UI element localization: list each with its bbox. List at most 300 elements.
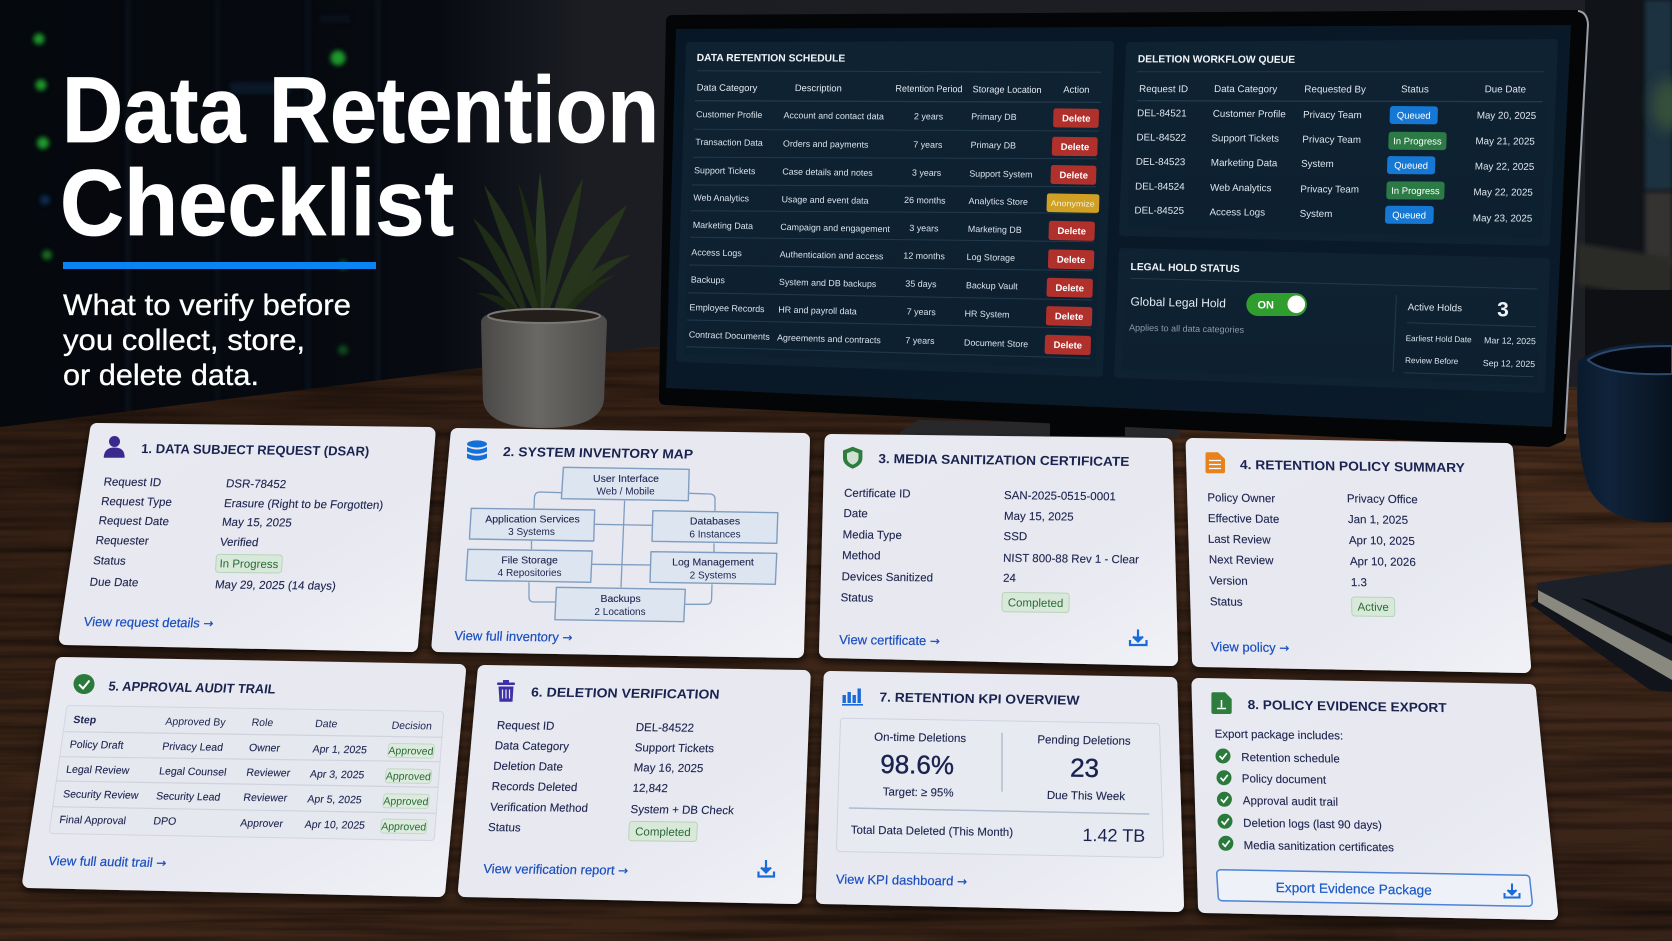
audit row: final approval [59, 814, 427, 834]
button: export evidence package: Export Evidence Package [1276, 880, 1432, 898]
row: support tickets [694, 165, 1096, 185]
link: view verification report: View verification report → [483, 861, 629, 878]
active holds: Active Holds [1408, 302, 1462, 314]
applies note: Applies to all data categories [1129, 323, 1245, 335]
queue row DEL-84524: Web Analytics [1210, 183, 1272, 194]
audit row: legal review: Apr 3, 2025 [309, 768, 365, 781]
row: transaction data [695, 137, 1098, 156]
policy fields: Status [1210, 596, 1243, 609]
queue row DEL-84523: DEL-84523 [1136, 157, 1186, 168]
queue row DEL-84523: System [1301, 159, 1334, 170]
verification fields: Verification Method [490, 802, 588, 815]
policy fields: Policy Owner [1207, 492, 1275, 505]
status pill: active [1352, 597, 1395, 617]
verification fields: DEL-84522 [635, 722, 694, 735]
kpi: pending deletions [1037, 734, 1131, 803]
verification fields: Status [488, 822, 521, 834]
queue header row: Request ID [1139, 84, 1188, 95]
audit header row: Date [314, 718, 338, 730]
icon: green check badge [74, 674, 94, 694]
monitor frame [665, 11, 1588, 441]
audit row: final approval: Apr 10, 2025 [304, 819, 366, 832]
row: support tickets: Case details and notes [782, 167, 873, 178]
heading: 6. DELETION VERIFICATION [530, 685, 720, 702]
node: file storage: File Storage [501, 554, 558, 566]
panel: legal hold status [1118, 252, 1546, 389]
row: transaction data: Primary DB [970, 140, 1016, 151]
button: export evidence package [1220, 874, 1528, 902]
audit row: legal review: Legal Counsel [158, 765, 227, 779]
icon: orange document [1206, 452, 1225, 473]
row: backups: Backups [691, 275, 726, 285]
row: customer profile: Account and contact data [783, 110, 884, 121]
audit row: policy draft: Privacy Lead [161, 741, 224, 754]
audit row: policy draft: Apr 1, 2025 [312, 743, 368, 756]
audit header row: Approved By [165, 716, 227, 729]
panel: 7 retention KPI overview [823, 678, 1177, 905]
row: support tickets: 3 years [912, 168, 942, 178]
row: customer profile [696, 108, 1099, 128]
row: contract documents: Document Store [964, 338, 1028, 349]
policy fields: Apr 10, 2026 [1350, 556, 1416, 569]
heading: 1. DATA SUBJECT REQUEST (DSAR) [141, 441, 370, 459]
verification fields: System + DB Check [630, 804, 734, 817]
certificate fields: SAN-2025-0515-0001 [1004, 490, 1116, 503]
queue header row: Status [1401, 84, 1429, 95]
kpi box background [840, 722, 1160, 854]
status pill: in progress [215, 554, 282, 573]
panel: 5 approval audit trail [29, 664, 459, 890]
node: databases: 6 Instances [689, 529, 741, 540]
hold dates: Sep 12, 2025 [1483, 358, 1535, 369]
heading: legal hold status: LEGAL HOLD STATUS [1130, 262, 1240, 275]
toggle: on [1246, 293, 1307, 316]
notebook and pen [1530, 564, 1672, 692]
icon: green spreadsheet [1211, 692, 1232, 714]
request fields: Request Date [98, 515, 170, 528]
certificate fields: Media Type [842, 529, 902, 542]
icon: person [104, 436, 125, 458]
node: backups: Backups [600, 593, 641, 605]
checklist: retention schedule [1216, 748, 1340, 766]
checklist: media sanitization certificates [1218, 836, 1394, 854]
background: right side window and ledge [1578, 0, 1672, 400]
verification fields: Request ID [496, 720, 555, 733]
node: user interface [561, 467, 689, 501]
request fields: Status [92, 555, 127, 568]
panel: 1 data subject request [66, 430, 428, 645]
kpi dividers [849, 733, 1149, 814]
link: view full inventory: View full inventory → [454, 628, 573, 645]
kpi: total data deleted: 1.42 TB [1082, 825, 1145, 846]
panel: 3 media sanitization certificate [826, 441, 1171, 659]
row: backups: Backup Vault [966, 280, 1018, 291]
panel: deletion workflow queue [1123, 43, 1554, 242]
request fields: Verified [219, 537, 259, 549]
audit row: security review: Approved [383, 795, 429, 808]
coffee mug [1577, 342, 1672, 522]
policy fields: Jan 1, 2025 [1348, 514, 1408, 527]
queue row DEL-84523: May 22, 2025 [1475, 162, 1535, 173]
row: employee records: 7 years [907, 307, 937, 317]
kpi: total data deleted: Total Data Deleted (This Month) [851, 825, 1013, 839]
checklist: deletion logs [1218, 814, 1382, 832]
hold dates: Mar 12, 2025 [1484, 335, 1536, 346]
status pill: completed: Completed [635, 826, 691, 839]
checklist: media sanitization certificates: Media sanitization certificates [1244, 840, 1394, 854]
audit row: security review: Security Lead [155, 790, 221, 804]
panel: data retention schedule [680, 45, 1110, 373]
toggle: on: ON [1258, 300, 1274, 312]
policy fields: Apr 10, 2025 [1349, 535, 1415, 548]
audit row: security review: Security Review [62, 788, 140, 802]
row: employee records: HR System [964, 309, 1010, 320]
queue row DEL-84523 [1136, 156, 1535, 174]
schedule header row: Storage Location [972, 83, 1042, 95]
certificate fields: Devices Sanitized [841, 571, 933, 584]
row: access logs: Log Storage [966, 252, 1015, 263]
row: support tickets: Support System [969, 169, 1033, 180]
node: log management [650, 552, 777, 584]
audit header row: Role [251, 717, 274, 729]
heading: 5. APPROVAL AUDIT TRAIL [108, 679, 277, 696]
row: web analytics [693, 193, 1100, 213]
queue row DEL-84521: Privacy Team [1303, 110, 1362, 121]
audit header row: Step [73, 714, 98, 726]
queue row DEL-84524 [1135, 181, 1534, 200]
certificate fields: SSD [1003, 531, 1027, 543]
certificate fields: 24 [1003, 573, 1017, 585]
status pill: active: Active [1357, 602, 1389, 614]
queue row DEL-84525: Access Logs [1209, 207, 1265, 219]
row: contract documents: Delete [1053, 340, 1082, 352]
row: access logs: Delete [1057, 254, 1086, 266]
kpi: pending deletions: Pending Deletions [1037, 734, 1131, 748]
row: marketing data [693, 220, 1095, 241]
plant in grey pot [457, 172, 631, 428]
row: backups: Delete [1055, 283, 1084, 295]
audit table dividers [53, 732, 443, 813]
heading: data retention schedule: DATA RETENTION SCHEDULE [697, 53, 845, 65]
queue row DEL-84522: DEL-84522 [1136, 133, 1186, 144]
audit row: security review: Reviewer [243, 792, 288, 804]
policy fields: 1.3 [1351, 577, 1367, 589]
queue row DEL-84525: May 23, 2025 [1473, 213, 1533, 225]
table dividers [686, 71, 1101, 358]
title: Data Retention [62, 57, 659, 162]
row: employee records [689, 302, 1092, 326]
queue row DEL-84524: May 22, 2025 [1473, 187, 1534, 199]
policy fields [1207, 492, 1418, 609]
queue header row [1139, 84, 1527, 96]
request fields: May 29, 2025 (14 days) [214, 579, 337, 593]
queue dividers [1137, 72, 1544, 102]
verification fields: Data Category [494, 740, 570, 753]
row: transaction data: Delete [1061, 142, 1089, 153]
row: marketing data: Marketing Data [693, 220, 753, 231]
audit row: final approval: DPO [153, 815, 177, 828]
link: view full audit trail: View full audit trail → [47, 853, 167, 870]
kpi: on-time deletions [874, 732, 967, 800]
certificate fields: Certificate ID [844, 488, 911, 500]
status pill: completed: Completed [1008, 597, 1064, 610]
link: view policy: View policy → [1211, 639, 1290, 655]
row: transaction data: Orders and payments [783, 139, 869, 150]
kpi: pending deletions: Due This Week [1047, 790, 1125, 803]
row: customer profile: Primary DB [971, 112, 1017, 122]
row: web analytics: 26 months [904, 195, 946, 206]
kpi box frame [840, 722, 1160, 854]
audit row: policy draft: Owner [248, 742, 281, 755]
row: web analytics: Usage and event data [781, 194, 869, 206]
queue row DEL-84521: May 20, 2025 [1477, 111, 1537, 122]
kpi: on-time deletions: 98.6% [880, 749, 954, 780]
global legal hold label: Global Legal Hold [1130, 295, 1226, 310]
certificate fields: Date [843, 508, 868, 520]
panel: 6 deletion verification [465, 672, 804, 897]
kpi: on-time deletions: On-time Deletions [874, 732, 967, 745]
certificate fields: May 15, 2025 [1004, 511, 1074, 524]
audit header row [73, 714, 433, 732]
export intro: Export package includes: [1214, 729, 1343, 743]
connectors [529, 492, 715, 604]
queue row DEL-84522: In Progress [1393, 136, 1442, 148]
audit row: final approval: Final Approval [59, 814, 127, 827]
icon: download [758, 860, 774, 876]
verification fields: Deletion Date [493, 761, 563, 774]
request fields: May 15, 2025 [221, 517, 292, 530]
checklist: approval audit trail [1217, 792, 1338, 809]
audit row: legal review [65, 764, 432, 784]
status pill: completed [1002, 592, 1069, 613]
checklist: retention schedule: Retention schedule [1241, 752, 1340, 766]
node: application services: Application Services [485, 514, 580, 526]
icon: download [1130, 630, 1146, 645]
row: customer profile: 2 years [914, 111, 944, 122]
node: databases [652, 511, 778, 543]
queue header row: Requested By [1304, 84, 1366, 96]
certificate fields [840, 488, 1139, 605]
row: customer profile: Customer Profile [696, 109, 762, 120]
panel: 4 retention policy summary [1193, 445, 1524, 666]
node: file storage [466, 549, 592, 582]
row: access logs [691, 247, 1094, 270]
request fields: Requester [95, 535, 150, 548]
node: databases: Databases [690, 516, 740, 528]
row: web analytics: Anonymize [1051, 199, 1095, 209]
audit row: policy draft: Policy Draft [69, 739, 124, 752]
certificate fields: NIST 800-88 Rev 1 - Clear [1003, 553, 1139, 566]
queue header row: Data Category [1214, 84, 1277, 95]
queue row DEL-84522: May 21, 2025 [1475, 136, 1536, 148]
policy fields: Version [1209, 575, 1248, 588]
hold dates [1405, 334, 1536, 369]
queue row DEL-84523: Marketing Data [1211, 158, 1278, 169]
audit row: legal review: Legal Review [65, 764, 130, 777]
panel: 2 system inventory map [438, 435, 803, 651]
legal hold dividers [1130, 278, 1537, 377]
row: support tickets: Support Tickets [694, 165, 756, 176]
node: log management: Log Management [672, 557, 754, 569]
node: application services [469, 508, 595, 541]
active holds [1408, 298, 1509, 322]
audit row: security review [62, 788, 430, 809]
row: marketing data: Marketing DB [968, 224, 1022, 235]
audit header row: Decision [391, 720, 433, 732]
row: transaction data: 7 years [913, 140, 943, 150]
audit row: policy draft: Approved [388, 745, 434, 758]
monitor stand [900, 420, 1180, 438]
row: employee records: Delete [1055, 311, 1084, 323]
heading: 7. RETENTION KPI OVERVIEW [879, 690, 1081, 708]
audit row: final approval: Approved [381, 821, 427, 834]
link: view KPI dashboard: View KPI dashboard → [836, 872, 967, 889]
checklist: policy document: Policy document [1242, 773, 1327, 787]
queue row DEL-84524: DEL-84524 [1135, 182, 1185, 193]
hold dates: Review Before [1405, 356, 1459, 366]
row: transaction data: Transaction Data [695, 137, 763, 148]
row: marketing data: Delete [1057, 226, 1086, 237]
queue row DEL-84521 [1137, 106, 1537, 124]
row: web analytics: Web Analytics [693, 193, 750, 204]
verification fields [488, 720, 734, 834]
request fields: Due Date [89, 577, 139, 589]
queue row DEL-84521: Queued [1397, 111, 1431, 122]
verification fields: 12,842 [632, 783, 668, 795]
queue row DEL-84523: Queued [1394, 161, 1428, 172]
active holds: 3 [1497, 298, 1509, 322]
audit row: security review: Apr 5, 2025 [307, 793, 363, 806]
schedule header row [697, 82, 1090, 95]
checklist: approval audit trail: Approval audit trail [1243, 795, 1338, 809]
status pill: completed [629, 821, 698, 842]
panel: 8 policy evidence export [1198, 685, 1551, 913]
verification fields: Records Deleted [491, 781, 578, 794]
certificate fields: Method [842, 550, 881, 562]
audit table frame [53, 709, 440, 837]
kpi: pending deletions: 23 [1070, 752, 1099, 783]
queue row DEL-84524: In Progress [1391, 186, 1440, 197]
row: contract documents [689, 330, 1091, 355]
icon: bar chart [842, 688, 863, 706]
node: user interface: User Interface [593, 473, 659, 485]
policy fields: Next Review [1209, 554, 1274, 567]
row: employee records: Employee Records [689, 302, 765, 314]
audit row: final approval: Approver [239, 817, 284, 830]
request fields: Request ID [103, 477, 162, 489]
certificate fields: Status [840, 592, 874, 605]
row: contract documents: Contract Documents [689, 330, 770, 342]
wooden desk [0, 340, 1672, 941]
subtitle: you collect, store, [63, 324, 305, 357]
verification fields: May 16, 2025 [633, 762, 704, 775]
icon: trash can [497, 680, 515, 702]
row: marketing data: 3 years [909, 223, 939, 233]
request fields: Erasure (Right to be Forgotten) [223, 498, 384, 512]
queue row DEL-84522: Privacy Team [1302, 135, 1361, 146]
row: access logs: Authentication and access [780, 249, 884, 261]
queue row DEL-84521: Customer Profile [1213, 109, 1286, 120]
heading: 3. MEDIA SANITIZATION CERTIFICATE [878, 451, 1130, 469]
audit table background [53, 709, 440, 837]
queue row DEL-84525: DEL-84525 [1134, 206, 1185, 217]
queue row DEL-84522: Support Tickets [1211, 133, 1279, 145]
queue row DEL-84525 [1134, 206, 1533, 225]
request fields: DSR-78452 [225, 478, 287, 491]
status pill: in progress: In Progress [219, 558, 279, 571]
request fields: Request Type [100, 496, 173, 509]
verification fields: Support Tickets [634, 742, 715, 755]
link: view certificate: View certificate → [839, 632, 940, 648]
monitor screen [666, 25, 1571, 427]
schedule header row: Retention Period [895, 83, 963, 94]
heading: 4. RETENTION POLICY SUMMARY [1240, 457, 1465, 475]
node: backups: 2 Locations [594, 607, 646, 618]
kpi: on-time deletions: Target: ≥ 95% [882, 786, 954, 800]
checklist: deletion logs: Deletion logs (last 90 days) [1243, 818, 1382, 832]
policy fields: Privacy Office [1347, 493, 1418, 506]
link: view request details: View request details → [83, 614, 215, 631]
node: user interface: Web / Mobile [597, 486, 655, 497]
queue header row: Due Date [1485, 84, 1527, 95]
subtitle: or delete data. [63, 359, 259, 392]
audit row: policy draft [69, 739, 434, 758]
icon: shield [843, 447, 862, 469]
heading: 8. POLICY EVIDENCE EXPORT [1247, 697, 1447, 715]
subtitle [63, 289, 351, 392]
node: file storage: 4 Repositories [498, 568, 562, 579]
row: marketing data: Campaign and engagement [780, 222, 891, 234]
queue row DEL-84521: DEL-84521 [1137, 108, 1187, 120]
row: backups: 35 days [905, 279, 937, 289]
row: employee records: HR and payroll data [778, 305, 857, 316]
title underline [63, 262, 376, 269]
node: application services: 3 Systems [508, 527, 555, 538]
request fields [89, 477, 384, 593]
audit row: legal review: Approved [385, 770, 432, 783]
queue row DEL-84524: Privacy Team [1300, 184, 1359, 196]
policy fields: Effective Date [1208, 513, 1279, 526]
row: customer profile: Delete [1062, 113, 1091, 125]
policy fields: Last Review [1208, 534, 1271, 547]
row: contract documents: Agreements and contracts [777, 333, 882, 345]
row: backups [691, 275, 1093, 298]
title [60, 57, 659, 255]
row: access logs: Access Logs [691, 247, 742, 258]
hold dates: Earliest Hold Date [1406, 334, 1472, 344]
checklist: policy document [1216, 770, 1327, 787]
icon: database [467, 440, 487, 460]
schedule header row: Action [1063, 84, 1090, 95]
title: Checklist [60, 150, 454, 255]
queue row DEL-84525: System [1300, 209, 1332, 220]
subtitle: What to verify before [63, 289, 351, 322]
schedule header row: Data Category [697, 82, 758, 93]
row: support tickets: Delete [1059, 170, 1088, 182]
queue row DEL-84522 [1136, 132, 1536, 150]
node: log management: 2 Systems [690, 571, 736, 582]
node: backups [555, 587, 685, 622]
audit row: legal review: Reviewer [246, 767, 291, 779]
row: web analytics: Analytics Store [968, 196, 1028, 207]
kpi: total data deleted [851, 825, 1145, 846]
row: contract documents: 7 years [905, 335, 935, 346]
schedule header row: Description [795, 82, 842, 93]
row: access logs: 12 months [903, 251, 946, 261]
heading: 2. SYSTEM INVENTORY MAP [502, 444, 694, 462]
queue row DEL-84525: Queued [1392, 210, 1426, 221]
row: backups: System and DB backups [779, 277, 877, 289]
